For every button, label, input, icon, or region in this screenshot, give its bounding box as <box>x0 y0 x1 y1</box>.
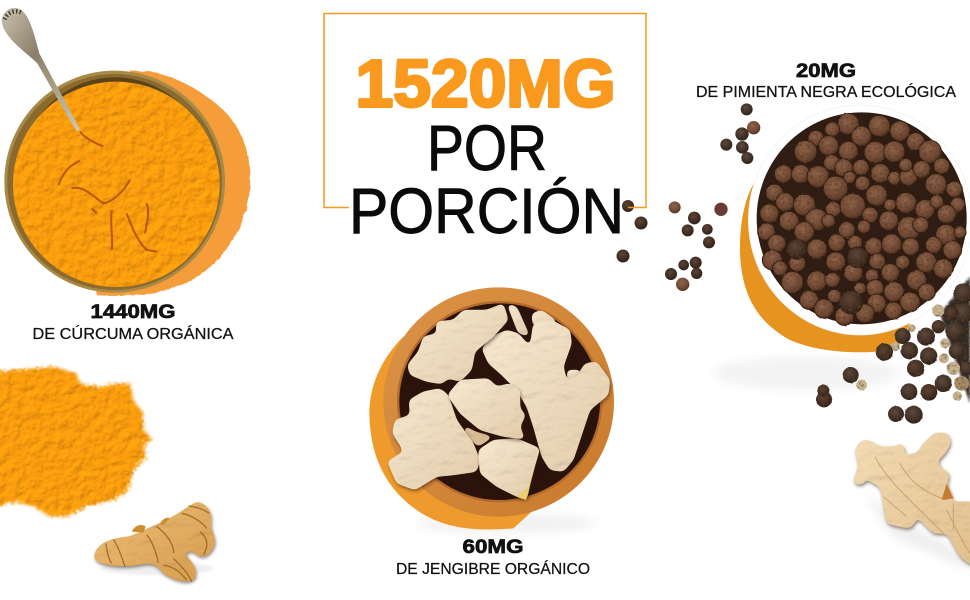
title: PORCIÓN: PORCIÓN <box>349 175 624 247</box>
title <box>349 46 624 247</box>
label: turmeric amount: DE CÚRCUMA ORGÁNICA <box>32 326 234 343</box>
panel: black pepper pile and fresh ginger, bottom right <box>816 277 970 570</box>
peppercorns in bowl <box>758 113 966 325</box>
powder cracks <box>58 132 157 252</box>
orange blob behind turmeric bowl <box>97 70 250 296</box>
soft shadow <box>417 513 597 533</box>
loose peppercorns under title <box>616 200 648 262</box>
orange blob behind ginger bowl <box>369 337 567 529</box>
wooden bowl <box>383 287 614 517</box>
label: pepper amount <box>696 61 957 101</box>
title: POR: POR <box>427 112 547 184</box>
ginger cut face <box>517 448 540 500</box>
turmeric bowl rim <box>4 71 225 293</box>
fresh ginger root <box>853 433 970 567</box>
soft shadow <box>713 357 900 390</box>
panel: pepper bowl <box>665 103 970 390</box>
title: 1520MG: 1520MG <box>356 46 616 122</box>
label: pepper amount: 20MG <box>796 61 856 82</box>
label: turmeric amount: 1440MG <box>90 302 176 323</box>
label: turmeric amount <box>32 302 234 343</box>
spoon <box>2 8 80 131</box>
turmeric root <box>94 502 215 582</box>
label: ginger amount: 60MG <box>462 537 524 558</box>
shadow under fresh ginger <box>863 493 970 570</box>
loose peppercorns left <box>665 201 728 291</box>
panel: turmeric powder pile <box>0 367 215 582</box>
panel: ginger bowl <box>369 287 614 533</box>
soft shadow under root <box>100 562 213 575</box>
label: pepper amount: DE PIMIENTA NEGRA ECOLÓGICA <box>696 84 957 101</box>
turmeric powder <box>13 82 220 287</box>
black pepper pile <box>816 277 970 424</box>
title frame <box>324 14 646 208</box>
label: ginger amount: DE JENGIBRE ORGÁNICO <box>396 561 590 578</box>
orange blob behind pepper bowl <box>740 182 913 352</box>
powder pile <box>0 367 152 517</box>
loose peppercorns top <box>720 103 760 164</box>
white bowl <box>748 105 970 335</box>
panel: turmeric bowl <box>2 8 250 296</box>
label: ginger amount <box>396 537 590 578</box>
ginger pieces <box>387 303 610 500</box>
